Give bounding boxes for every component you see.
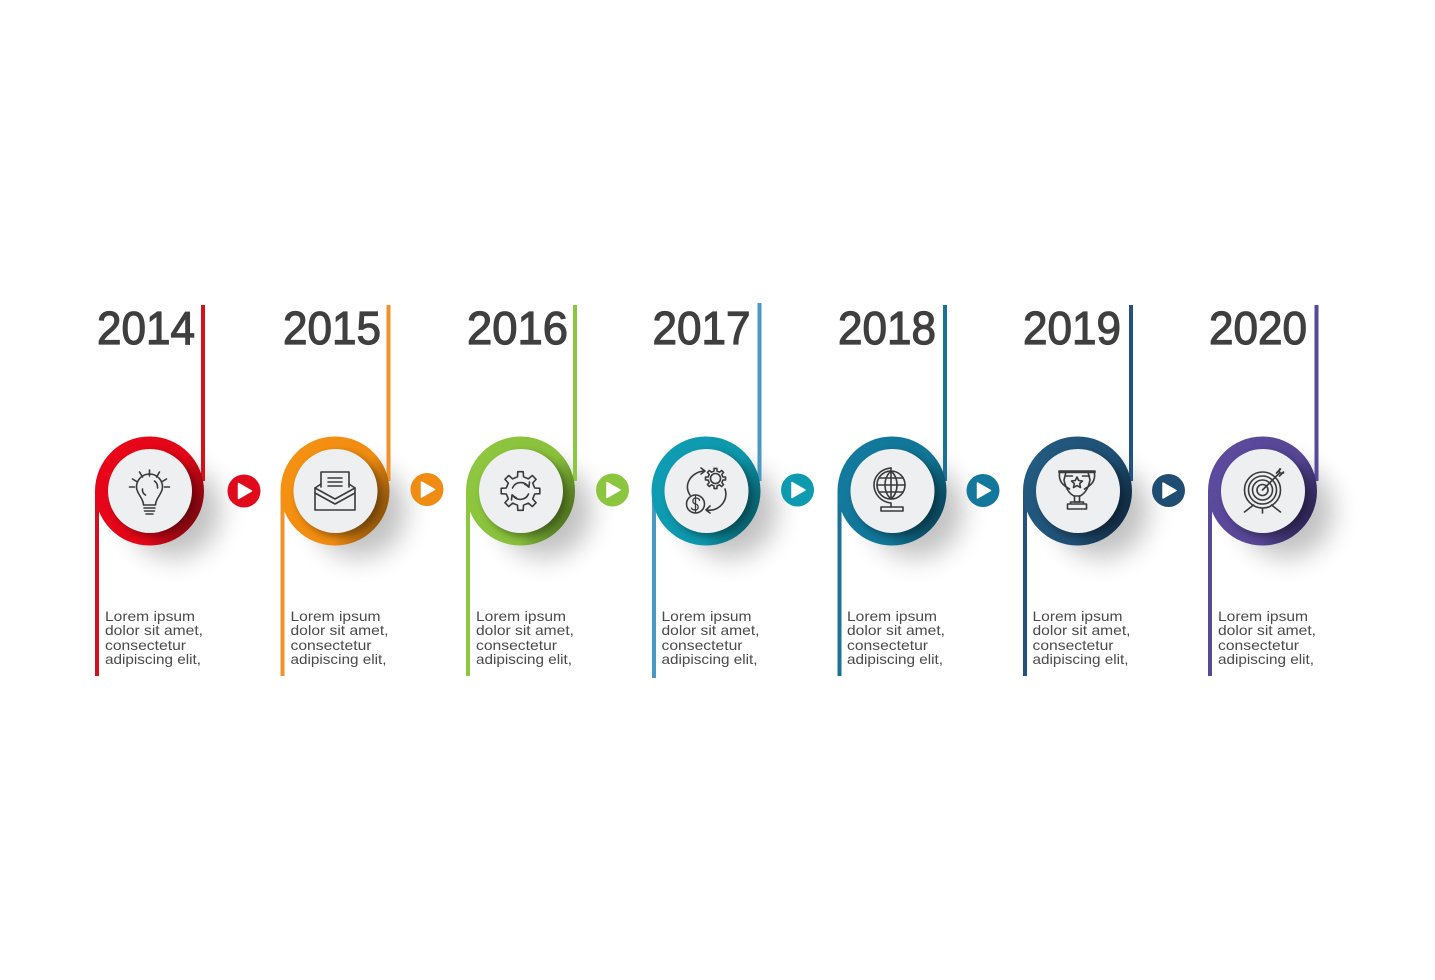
ring 2019 (1023, 436, 1132, 546)
description 2018: Lorem ipsum (847, 608, 937, 624)
arrow button 5 (966, 474, 1000, 507)
description 2016: dolor sit amet, (476, 622, 574, 638)
description 2014: Lorem ipsum (105, 608, 195, 624)
ring drop shadow 2019 (1054, 464, 1148, 558)
description 2019: dolor sit amet, (1032, 622, 1130, 638)
description 2017: Lorem ipsum (662, 608, 752, 624)
bottom connector line 2016 (466, 491, 470, 676)
arrow button 4 (781, 474, 814, 506)
description 2015: Lorem ipsum (290, 608, 380, 624)
description 2020: adipiscing elit, (1218, 651, 1314, 667)
description 2020 (1218, 608, 1316, 667)
icon: money and gear cycle (686, 468, 726, 513)
timeline step 2018 (838, 302, 963, 676)
timeline step 2017 (652, 302, 777, 678)
icon: envelope (315, 472, 355, 510)
timeline step 2016 (466, 302, 592, 676)
ring 2014 (95, 436, 204, 546)
description 2016: consectetur (476, 637, 557, 653)
timeline step 2015 (280, 302, 406, 676)
arrow button 6 (1152, 474, 1185, 507)
bottom connector line 2017 (652, 491, 656, 678)
description 2019: consectetur (1032, 637, 1114, 653)
arrow button 2 (410, 473, 444, 506)
ring drop shadow 2017 (683, 464, 777, 558)
ring drop shadow 2014 (126, 464, 220, 558)
description 2020: Lorem ipsum (1218, 608, 1308, 624)
description 2017: dolor sit amet, (662, 622, 759, 638)
ring drop shadow 2020 (1240, 464, 1334, 558)
disc shadow 2018 (855, 453, 939, 537)
icon: gear (501, 472, 540, 510)
year 2014: 2014 (97, 302, 195, 354)
description 2017 (662, 608, 760, 667)
disc shadow 2015 (298, 453, 382, 537)
ring 2016 (466, 436, 575, 546)
disc shadow 2019 (1040, 453, 1124, 537)
description 2016 (476, 608, 574, 667)
top connector line 2020 (1314, 305, 1318, 481)
description 2018: consectetur (847, 637, 928, 653)
icon: globe (874, 468, 905, 511)
ring 2020 (1208, 436, 1317, 546)
top connector line 2016 (573, 305, 577, 481)
description 2014: consectetur (105, 637, 186, 653)
top connector line 2015 (386, 305, 390, 481)
description 2016: Lorem ipsum (476, 608, 566, 624)
ring 2015 (280, 436, 390, 546)
ring 2017 (652, 436, 760, 546)
description 2018: adipiscing elit, (847, 651, 943, 667)
ring 2018 (838, 436, 946, 546)
ring drop shadow 2015 (312, 464, 406, 558)
disc shadow 2020 (1226, 453, 1310, 537)
year 2020: 2020 (1209, 302, 1307, 354)
bottom connector line 2018 (838, 491, 842, 676)
description 2016: adipiscing elit, (476, 651, 572, 667)
disc 2015 (294, 449, 378, 533)
description 2020: dolor sit amet, (1218, 622, 1316, 638)
timeline step 2020 (1208, 302, 1334, 676)
disc shadow 2017 (669, 453, 753, 537)
top connector line 2018 (943, 305, 947, 481)
description 2018: dolor sit amet, (847, 622, 945, 638)
disc 2019 (1036, 449, 1120, 533)
year 2019: 2019 (1023, 302, 1121, 354)
description 2019: adipiscing elit, (1032, 651, 1128, 667)
description 2019 (1032, 608, 1130, 667)
description 2015: dolor sit amet, (290, 622, 388, 638)
description 2014: dolor sit amet, (105, 622, 203, 638)
top connector line 2017 (758, 303, 762, 481)
ring drop shadow 2016 (498, 464, 592, 558)
description 2014 (105, 608, 203, 667)
arrow button 1 (228, 474, 260, 508)
description 2018 (847, 608, 945, 667)
icon: trophy (1059, 471, 1095, 509)
icon: light bulb (130, 470, 170, 514)
icon: target with arrow (1244, 469, 1284, 513)
description 2014: adipiscing elit, (105, 651, 201, 667)
disc shadow 2016 (484, 453, 568, 537)
year 2017: 2017 (652, 302, 750, 354)
disc shadow 2014 (112, 453, 196, 537)
description 2019: Lorem ipsum (1032, 608, 1122, 624)
timeline step 2014 (95, 302, 220, 676)
disc 2018 (850, 449, 934, 533)
bottom connector line 2014 (95, 491, 99, 676)
disc 2020 (1221, 449, 1305, 533)
bottom connector line 2015 (280, 491, 284, 676)
description 2020: consectetur (1218, 637, 1299, 653)
description 2015: adipiscing elit, (290, 651, 386, 667)
description 2015 (290, 608, 388, 667)
bottom connector line 2019 (1023, 491, 1027, 676)
arrow button 3 (596, 474, 629, 506)
bottom connector line 2020 (1208, 491, 1212, 676)
description 2015: consectetur (290, 637, 372, 653)
disc 2014 (108, 449, 192, 533)
top connector line 2019 (1129, 305, 1133, 481)
disc 2017 (664, 449, 748, 533)
disc 2016 (479, 449, 563, 533)
year 2015: 2015 (283, 302, 381, 354)
timeline step 2019 (1023, 302, 1148, 676)
top connector line 2014 (201, 305, 205, 481)
year 2018: 2018 (838, 302, 936, 354)
description 2017: adipiscing elit, (662, 651, 758, 667)
ring drop shadow 2018 (869, 464, 963, 558)
description 2017: consectetur (662, 637, 743, 653)
year 2016: 2016 (467, 302, 568, 354)
